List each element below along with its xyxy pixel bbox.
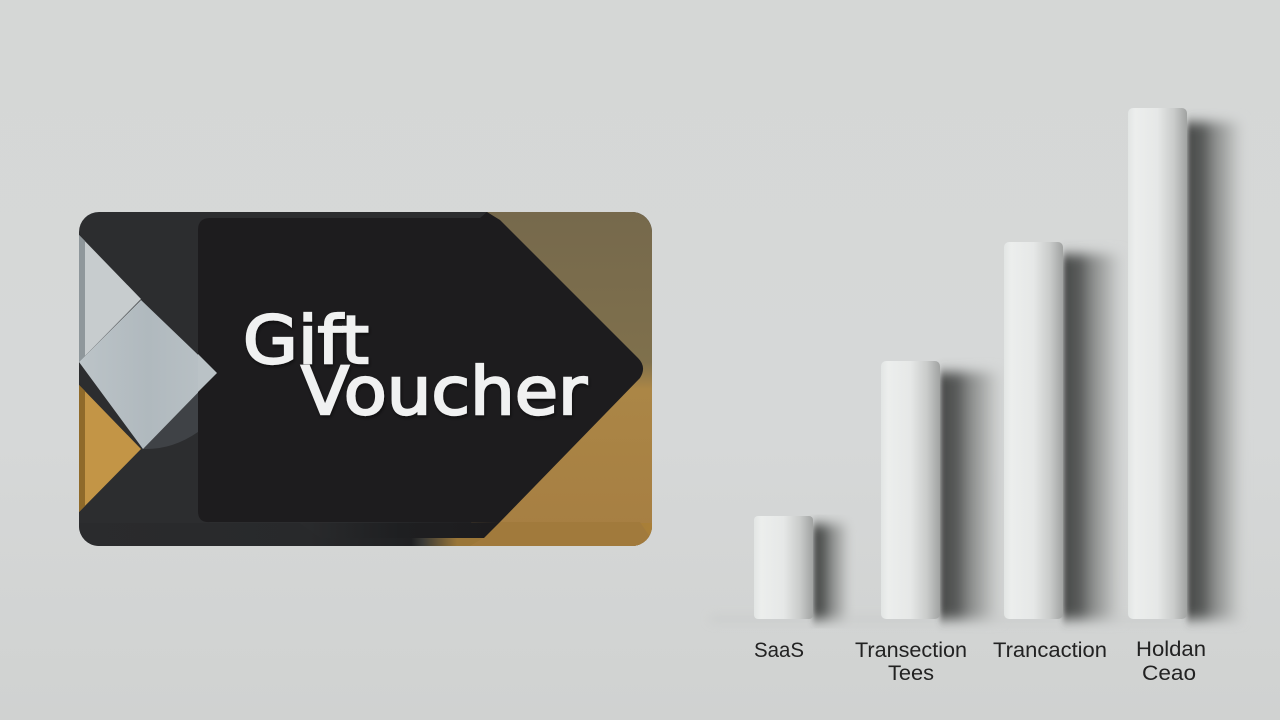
gold right panel: [470, 212, 652, 546]
title: Voucher: Voucher: [301, 353, 588, 430]
translucent diamond tip: [198, 354, 217, 392]
brown left edge strip: [79, 385, 85, 512]
label: Transection Fees: [855, 639, 967, 685]
label: Holdan Ceao: [1136, 638, 1206, 685]
grey lens under diamond: [143, 392, 198, 449]
gold triangle: [79, 385, 141, 512]
light top triangle: [79, 235, 141, 362]
light diamond: [79, 300, 198, 449]
card bottom band: [79, 523, 652, 546]
bar 2: Transection Fees: [881, 361, 1008, 619]
label: Holdan Ceao: Ceao: [1142, 662, 1196, 685]
gold band bevel: [635, 536, 650, 546]
gift voucher card: [79, 212, 652, 546]
black arrow panel: [198, 212, 643, 522]
bar 4: Holdan Ceao: [1128, 108, 1249, 619]
bar 1: SaaS: [754, 516, 855, 619]
label: Transection Fees: Tees: [888, 662, 934, 685]
grey left edge strip: [79, 235, 85, 362]
label: SaaS: SaaS: [754, 639, 804, 662]
card base: [79, 212, 652, 546]
dark lower strip of arrow panel: [380, 522, 500, 538]
title: Gift: Gift: [243, 302, 369, 379]
bar 3: Trancaction: [1004, 242, 1129, 619]
label: Transection Fees: Transection: [855, 639, 967, 662]
floor shadow line: [710, 616, 1240, 622]
label: Trancaction: Trancaction: [993, 639, 1107, 662]
label: Holdan Ceao: Holdan: [1136, 638, 1206, 661]
bar chart: [710, 108, 1249, 622]
